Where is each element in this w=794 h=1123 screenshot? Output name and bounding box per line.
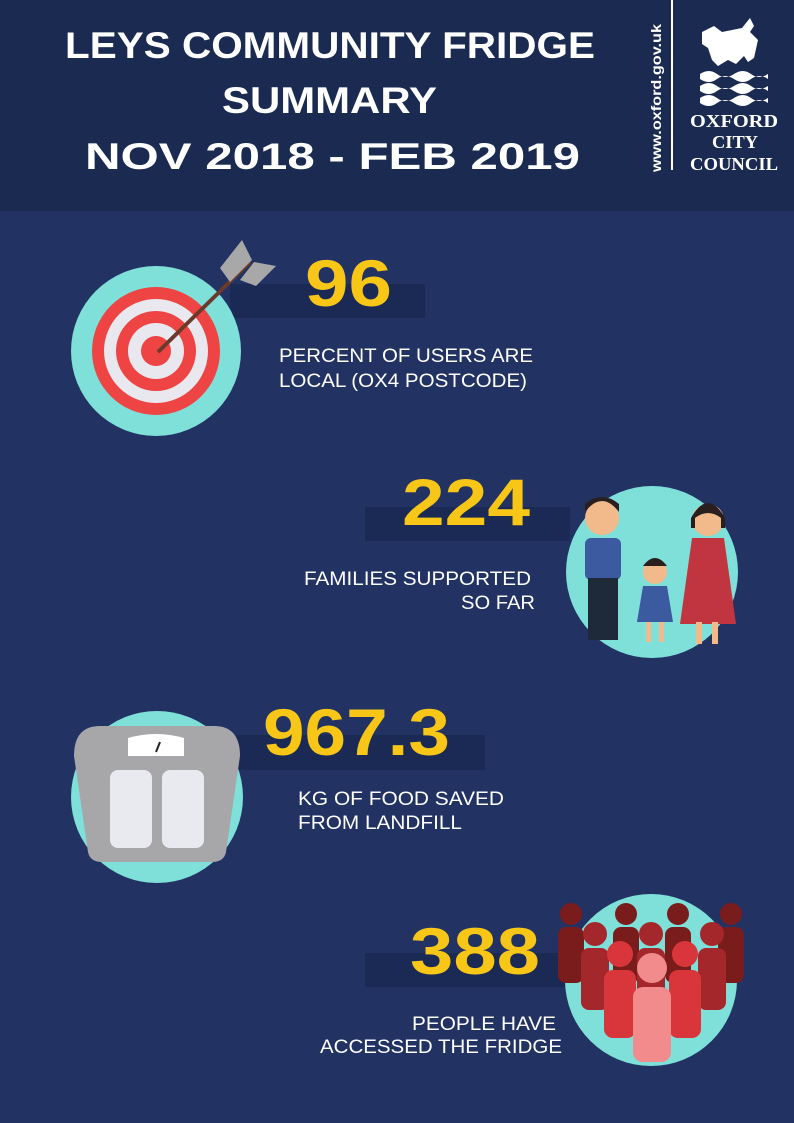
- logo: oxford city council: COUNCIL: [690, 154, 778, 174]
- stat 2: 224 families: 224: [402, 465, 530, 539]
- stat 4: 388 people: ACCESSED THE FRIDGE: [320, 1037, 562, 1058]
- header band: [0, 0, 794, 211]
- stat 2: 224 families: FAMILIES SUPPORTED: [304, 569, 531, 590]
- icon: scale: [71, 711, 243, 883]
- title: LEYS COMMUNITY FRIDGE: [65, 25, 595, 66]
- logo: oxford city council: OXFORD: [690, 111, 778, 131]
- stat 3: 967.3 kg: KG OF FOOD SAVED: [298, 789, 504, 810]
- stat 3: 967.3 kg: 967.3: [263, 695, 450, 769]
- stat 2: 224 families: [304, 465, 738, 658]
- logo: oxford city council: www.oxford.gov.uk: [648, 24, 664, 173]
- stat 1: 96 local users: PERCENT OF USERS ARE: [279, 346, 533, 367]
- title: NOV 2018 - FEB 2019: [85, 136, 580, 177]
- title: SUMMARY: [222, 80, 437, 121]
- stat 4: 388 people: PEOPLE HAVE: [412, 1014, 556, 1035]
- stat 1: 96 local users: LOCAL (OX4 POSTCODE): [279, 371, 527, 392]
- stat 1: 96 local users: [71, 240, 533, 436]
- logo: oxford city council: [648, 0, 778, 174]
- stat 3: 967.3 kg: [71, 695, 504, 883]
- stat 3: 967.3 kg: FROM LANDFILL: [298, 813, 462, 834]
- stat 4: 388 people: [320, 894, 744, 1066]
- logo: oxford city council: CITY: [712, 132, 758, 152]
- title: [65, 25, 595, 177]
- icon: family: [566, 486, 738, 658]
- icon: crowd: [558, 894, 744, 1066]
- icon: target: [71, 240, 276, 436]
- stat 2: 224 families: SO FAR: [461, 593, 535, 614]
- stat 4: 388 people: 388: [410, 914, 540, 988]
- stat 1: 96 local users: 96: [305, 246, 392, 320]
